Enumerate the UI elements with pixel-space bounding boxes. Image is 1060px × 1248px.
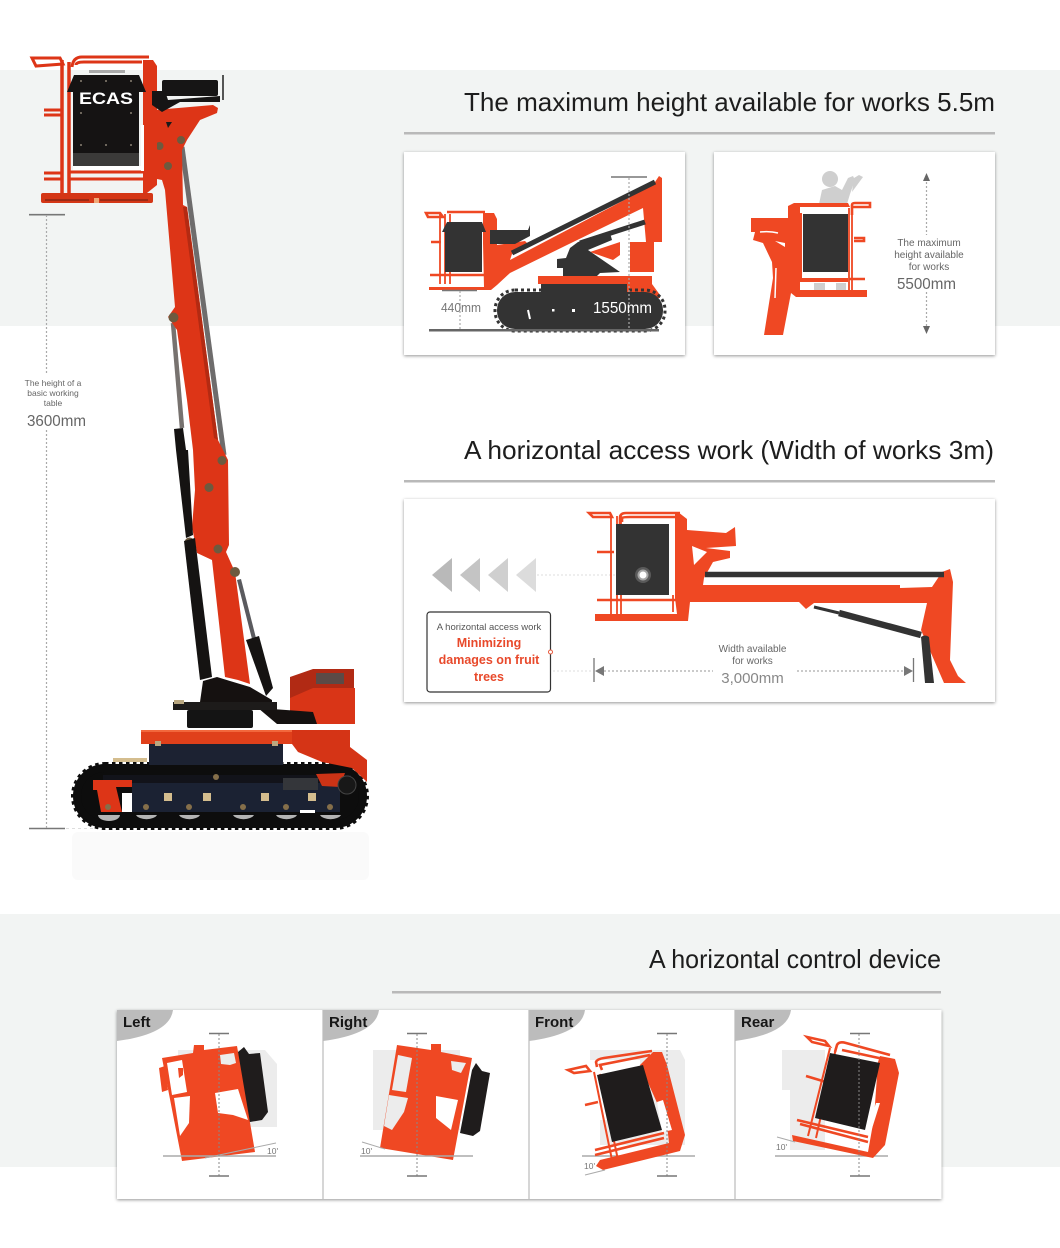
control console [152,75,224,112]
tilt view: right: 10' [361,1146,372,1156]
engine box [290,669,355,724]
label 1550mm: 1550mm [593,300,652,317]
crawler track [73,744,367,828]
width dimension: for works [732,656,773,667]
width dimension: 3,000mm [721,670,784,687]
callout [427,612,552,692]
panel: side view heights [404,152,685,355]
callout: Minimizing [457,636,521,650]
tilt view: front: Front [535,1014,573,1031]
main machine illustration [32,57,367,828]
tilt view: right [323,1010,490,1176]
boom arm [152,105,250,684]
width dimension [553,644,914,687]
target marker [635,567,651,583]
vertical arrow [923,173,930,334]
machine reflection [72,832,369,880]
width dimension: Width available [719,644,787,655]
pivot pins [156,136,240,577]
height dimension label: 3600mm [27,413,86,430]
tilt view: front: 10' [584,1161,595,1171]
tilt view: left [117,1010,278,1176]
callout: trees [474,670,504,684]
height dimension label: basic working [27,388,79,398]
direction arrows [432,558,640,592]
tilt view: rear: 10' [776,1142,787,1152]
operator panel [67,70,146,166]
height dimension: basic working table [25,215,100,828]
height dimension label: The height of a [25,378,82,388]
height dimension label: table [44,398,62,408]
silhouette side machine [426,176,665,331]
tilt view: right: Right [329,1014,367,1031]
tilt view: rear [735,1010,899,1176]
callout: A horizontal access work [437,622,542,633]
heading: maximum height: The maximum height available for works 5.5m [464,87,995,117]
chassis deck [141,730,367,782]
turret base [173,677,317,728]
panel: horizontal access work [404,499,995,702]
person silhouette [814,171,863,291]
ECAS logo: ECAS [79,89,133,108]
heading: control device: A horizontal control device [649,944,941,974]
tilt view: rear: Rear [741,1014,775,1031]
maximum height label: height available [894,250,964,261]
height dimension label [25,378,86,430]
tilt view: front [529,1010,695,1176]
callout: damages on fruit [439,653,540,667]
label 440mm: 440mm [441,301,481,315]
maximum height label: The maximum [897,238,961,249]
horizontal boom silhouette [589,512,966,683]
working basket [32,57,157,203]
maximum height label [894,238,964,293]
panel: tilt views [117,1010,942,1199]
tilt view: left: Left [123,1014,150,1031]
maximum height label: 5500mm [897,276,956,293]
maximum height label: for works [909,262,949,273]
hydraulic cylinders [174,428,273,696]
platform rear silhouette [751,203,870,335]
panel: maximum working height [714,152,995,355]
tilt view: left: 10' [267,1146,278,1156]
heading: horizontal access: A horizontal access work (Width of works 3m) [464,435,994,465]
